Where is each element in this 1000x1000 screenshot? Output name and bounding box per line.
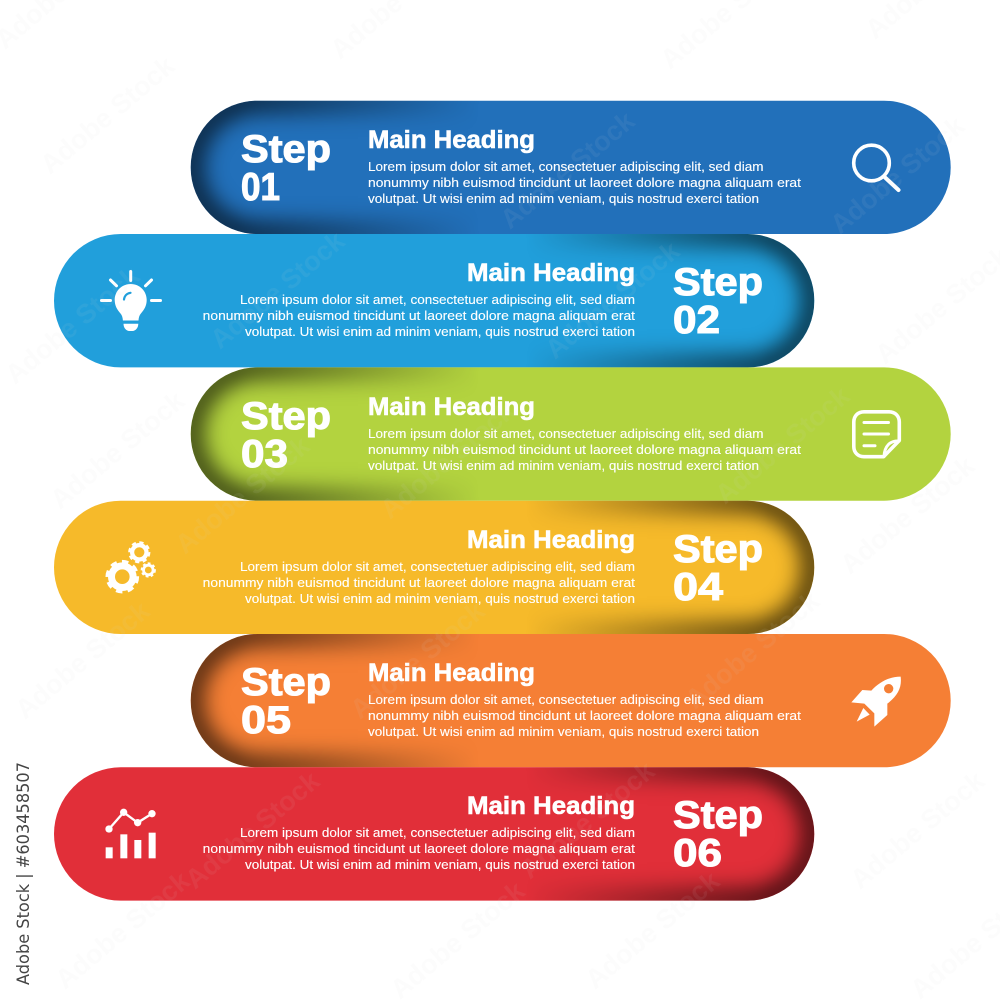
heading: Main Heading xyxy=(368,659,535,687)
pill background: red xyxy=(54,767,814,901)
step label xyxy=(673,794,763,875)
body text xyxy=(203,293,636,339)
body text: volutpat. Ut wisi enim ad minim veniam, quis nostrud exerci tation xyxy=(368,725,759,739)
body text xyxy=(368,427,802,473)
heading: Main Heading xyxy=(368,393,535,421)
inner shadow: right end xyxy=(542,767,814,901)
body text: Lorem ipsum dolor sit amet, consectetuer adipiscing elit, sed diam xyxy=(240,826,635,840)
body text: volutpat. Ut wisi enim ad minim veniam, quis nostrud exerci tation xyxy=(245,325,635,339)
step label xyxy=(241,128,331,209)
pill background: green xyxy=(191,367,951,501)
watermark: repeated stock marks: Adobe Stock xyxy=(45,385,191,515)
body text: nonummy nibh euismod tincidunt ut laoreet dolore magna aliquam erat xyxy=(203,309,636,323)
body text: Lorem ipsum dolor sit amet, consectetuer adipiscing elit, sed diam xyxy=(368,693,764,707)
heading: Main Heading xyxy=(467,792,635,820)
pill background: blue xyxy=(191,101,951,234)
watermark: repeated stock marks: Adobe Stock xyxy=(10,595,156,725)
step label: 05 xyxy=(241,699,291,742)
inner shadow: right end xyxy=(542,234,814,368)
body text: volutpat. Ut wisi enim ad minim veniam, quis nostrud exerci tation xyxy=(245,592,635,606)
body text: Lorem ipsum dolor sit amet, consectetuer adipiscing elit, sed diam xyxy=(368,427,764,441)
step label: 04 xyxy=(673,566,723,609)
watermark: repeated stock marks: Adobe Stock xyxy=(170,430,316,560)
watermark: repeated stock marks: Adobe Stock xyxy=(0,260,146,390)
inner shadow: left end xyxy=(190,367,462,501)
body text xyxy=(368,160,802,206)
panel: step 01 xyxy=(191,101,951,234)
watermark: repeated stock marks: Adobe Stock xyxy=(710,380,856,510)
watermark: repeated stock marks: Adobe Stock xyxy=(205,225,351,355)
body text xyxy=(368,693,802,739)
icon: rocket xyxy=(851,677,901,727)
watermark: repeated stock marks: Adobe Stock xyxy=(50,865,196,995)
step label: 01 xyxy=(241,166,280,209)
body text: nonummy nibh euismod tincidunt ut laoreet dolore magna aliquam erat xyxy=(368,443,802,457)
inner shadow: left end xyxy=(190,634,464,768)
step label: 03 xyxy=(241,433,288,476)
step label xyxy=(241,661,331,742)
heading: Main Heading xyxy=(467,526,635,554)
icon: magnifying glass xyxy=(854,145,898,190)
pill background: orange xyxy=(191,634,951,767)
body text: nonummy nibh euismod tincidunt ut laoreet dolore magna aliquam erat xyxy=(368,709,802,723)
step label: Step xyxy=(673,261,763,304)
body text: volutpat. Ut wisi enim ad minim veniam, quis nostrud exerci tation xyxy=(245,858,635,872)
panel: step 05 xyxy=(191,634,951,767)
watermark: repeated stock marks: Adobe Stock xyxy=(540,235,686,365)
icon: light bulb xyxy=(102,272,160,331)
watermark: repeated stock marks: Adobe Stock xyxy=(845,765,991,895)
step label xyxy=(241,395,331,476)
panel: step 04 xyxy=(54,501,814,634)
watermark: repeated stock marks: Adobe Stock xyxy=(515,755,661,885)
panel: step 03 xyxy=(191,367,951,501)
step label: Step xyxy=(241,661,331,704)
body text: volutpat. Ut wisi enim ad minim veniam, quis nostrud exerci tation xyxy=(368,459,759,473)
body text: nonummy nibh euismod tincidunt ut laoreet dolore magna aliquam erat xyxy=(203,842,636,856)
step label: 02 xyxy=(673,299,720,342)
watermark: repeated stock marks: Adobe Stock xyxy=(495,105,641,235)
stock id caption: Adobe Stock | #603458507 xyxy=(14,762,33,985)
icon: sticky note xyxy=(854,412,899,457)
inner shadow: right end xyxy=(540,500,814,634)
body text: Lorem ipsum dolor sit amet, consectetuer adipiscing elit, sed diam xyxy=(240,293,635,307)
step label: Step xyxy=(673,794,763,837)
watermark: repeated stock marks: Adobe Stock xyxy=(580,865,726,995)
body text xyxy=(203,826,636,872)
panel: step 02 xyxy=(54,234,814,367)
pill background: yellow xyxy=(54,501,814,634)
heading: Main Heading xyxy=(368,126,535,154)
body text: nonummy nibh euismod tincidunt ut laoreet dolore magna aliquam erat xyxy=(203,576,636,590)
inner shadow: left end xyxy=(190,100,458,234)
watermark: repeated stock marks: Adobe Stock xyxy=(835,450,981,580)
step label: Step xyxy=(241,128,331,171)
icon: gears xyxy=(107,543,155,592)
heading: Main Heading xyxy=(467,259,635,287)
step label xyxy=(673,261,763,342)
watermark: repeated stock marks: Adobe Stock xyxy=(375,395,521,525)
step label: Step xyxy=(241,395,331,438)
step label: Step xyxy=(673,528,763,571)
step label xyxy=(673,528,763,609)
panel: step 06 xyxy=(54,767,814,901)
body text xyxy=(203,560,636,606)
watermark: repeated stock marks: Adobe Stock xyxy=(180,765,326,895)
step label: 06 xyxy=(673,832,722,875)
pill background: sky blue xyxy=(54,234,814,367)
watermark: repeated stock marks: Adobe Stock xyxy=(825,110,971,240)
body text: Lorem ipsum dolor sit amet, consectetuer adipiscing elit, sed diam xyxy=(240,560,635,574)
watermark: repeated stock marks: Adobe Stock xyxy=(680,585,826,715)
body text: Lorem ipsum dolor sit amet, consectetuer adipiscing elit, sed diam xyxy=(368,160,764,174)
watermark: repeated stock marks: Adobe Stock xyxy=(35,50,181,180)
icon: chart with trend line xyxy=(105,809,156,858)
body text: volutpat. Ut wisi enim ad minim veniam, quis nostrud exerci tation xyxy=(368,192,759,206)
watermark: repeated stock marks: Adobe Stock xyxy=(345,595,491,725)
body text: nonummy nibh euismod tincidunt ut laoreet dolore magna aliquam erat xyxy=(368,176,802,190)
